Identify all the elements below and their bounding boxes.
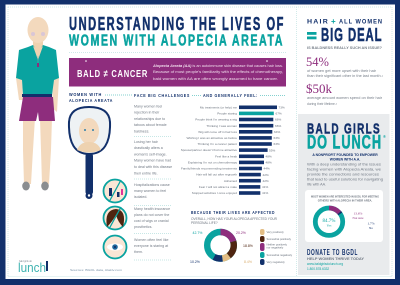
bar chart: feelings: 42% [262,173,269,177]
panel: hair and all women big deal [307,17,383,50]
bar chart: feelings: Thinking I'm a cancer patient [198,142,237,146]
bar chart: feelings: 73% [278,106,285,110]
panel paragraph: With a deep understanding of the issues [307,162,381,166]
title [69,14,285,50]
donut labels: 84.7% [323,219,335,224]
panel paragraph: facing women with Alopecia Areata, we [307,168,381,172]
panel: hair and all women big deal: + [331,17,336,26]
challenges text list: Women often feel like [134,238,168,242]
bar chart: feelings: Wishing I was an attractive as before [186,136,237,140]
bar chart: feelings: Ashamed [224,179,237,183]
challenges text list: Losing her hair [134,140,159,144]
challenges text list: prosthetics. [134,225,152,229]
challenges text list: plans do not cover the [134,213,169,217]
bar chart: feelings: 66% [275,118,281,122]
banner text: Because of most people's familiarity with the effects of chemotherapy, [153,69,283,74]
donut chart: personal life [207,232,234,259]
bar chart: feelings: 44% [264,167,270,171]
bar chart: feelings: 48% [266,154,272,158]
banner headline: BALD ≠ CANCER [77,68,148,80]
bar chart: feelings: 67% [276,112,282,116]
bar chart: feelings: People staring [217,112,237,116]
title: WOMEN WITH ALOPECIA AREATA [69,32,284,50]
bar chart: feelings: Fear I will not attract a mate [199,185,237,189]
donut labels: 10.2% [190,260,200,264]
icon: makeup crossed out [104,180,126,202]
stat: 54 percent [306,55,384,78]
stat: 50k [306,81,383,106]
bar chart: feelings: 48% [266,161,272,165]
banner text [152,63,283,81]
donut legend [260,229,293,265]
challenges text list: everyone is staring at [134,244,168,248]
source: Sources: BGDL data, Alakiv.com [70,268,123,272]
challenges text list: Many health insurance [134,207,170,211]
panel: hair and all women big deal: ALL WOMEN [339,18,383,26]
illustration: hand mirror [69,107,110,199]
banner text: bald women with AA are often wrongly assumed to have cancer. [153,76,278,81]
donut labels: No [369,226,373,230]
bar chart: feelings: 41% [262,191,268,195]
donut labels: 42.7% [192,231,202,235]
bar chart: feelings: Stopped activities I once enjoyed [192,191,237,195]
challenges text list: woman's self-image. [134,152,167,156]
panel heading: ® [383,134,386,139]
bar chart: feelings: 55% [269,148,275,152]
challenges text list: them. [134,250,143,254]
icon: eye [104,236,126,258]
challenges text list: baldness. [134,130,149,134]
bar chart: feelings: 63% [274,142,280,146]
donut legend: Somewhat negatively [266,253,293,257]
heading: women with alopecia areata: WOMEN WITH [69,92,102,97]
challenges text list: rejection in their [134,110,160,114]
panel paragraph: that lead to useful solutions for navigating [307,178,383,182]
banner text: Alopecia Areata (AA) is an autoimmune skin disease that causes hair loss. [152,63,283,68]
donut legend: Very positively [266,230,284,234]
challenges text list: isolated. [134,195,147,199]
bar chart: feelings: Wig will come off in hair loss [198,130,237,134]
donut labels: Yes [327,224,332,228]
banner: bald is not cancer [69,58,286,86]
challenges text list: drastically alters a [134,146,163,150]
bar chart: feelings: Hair will fall out after regrowth [196,173,237,177]
illustration: bald woman [16,17,59,190]
panel paragraph [307,162,383,186]
donut legend: Neither positively [266,243,288,247]
logo: bald girls do lunch: lunch [18,260,46,275]
donut labels: 20.2% [236,231,246,235]
donate [307,248,365,271]
bar chart: feelings: Family/friends recommending treatments [181,167,237,171]
bar chart: feelings: Explaining I'm not on chemotherapy [188,160,237,164]
equals sign [307,32,316,39]
challenges text list [134,104,172,254]
stat: 54 percent: than their significant other in the last month.¹ [307,74,384,78]
stat: 50k: during their lifetime.² [307,102,338,106]
heading: because their lives are affected: OVERALL, HOW HAS YOUR ALOPECIA AFFECTED YOUR [191,217,278,221]
bar chart: feelings: 42% [262,179,269,183]
heading: because their lives are affected: BECAUSE THEIR LIVES ARE AFFECTED [191,210,275,216]
donut labels: 18.8% [243,244,253,248]
panel white card [305,190,383,242]
donut labels: Not sure [353,216,364,220]
donate: DONATE TO BGDL [307,248,358,257]
donut legend: nor negatively [266,246,284,250]
bar chart: feelings: Thinking I was woman [206,124,237,128]
panel: bald girls do lunch [298,114,390,275]
stat: 50k: $50k [306,81,332,96]
donut labels [190,231,253,264]
bar chart: feelings: 41% [262,185,268,189]
stat: 50k: average amount women spend on their hair [307,96,383,100]
bar chart: feelings: 64% [274,130,280,134]
stat: 54 percent: of women get more upset with their hair [307,69,377,73]
heading: face big challenges: FACE BIG CHALLENGES [134,93,190,98]
donut legend: Somewhat positively [266,237,292,241]
bar chart: feelings [181,105,285,195]
panel heading [307,120,386,154]
donut chart: interest [315,208,343,235]
challenges text list: Many women have had [134,158,171,162]
donate: 1.800.578.6332 [307,267,329,271]
donut labels: 8.4% [244,260,252,264]
donate: HELP WOMEN THRIVE TODAY [307,257,365,261]
panel: hair and all women big deal: IS BALDNESS REALLY SUCH AN ISSUE? [307,46,382,50]
bar chart: feelings: Feel like a freak [215,154,237,158]
panel: bald girls do lunch: MOST WOMEN ARE INTERESTED IN BGDL FOR MEETING [311,194,379,198]
bar chart: feelings: 63% [274,136,280,140]
donut labels: 1.7% [367,222,375,226]
panel paragraph: life with AA. [307,182,326,186]
heading: women with alopecia areata [69,92,113,103]
heading: and generally feel: AND GENERALLY FEEL: [203,93,258,98]
donut legend: Very negatively [266,260,285,264]
panel subheading [312,153,378,162]
bar chart: feelings: Spouse/partner doesn't find me attractive [181,148,237,152]
heading: because their lives are affected: PERSONAL LIFE? [191,221,218,225]
icon: wig crossed out [104,206,126,230]
donate: www.baldgirlsdolunch.org [307,262,343,266]
heading: because their lives are affected [191,210,278,225]
challenges text list: many women to feel [134,189,166,193]
donut labels: 13.6% [354,212,363,216]
panel: bald girls do lunch: OTHERS WITH ALOPECIA IN THEIR AREA. [318,198,372,202]
logo: bald girls do lunch: bald girls do [19,260,33,263]
challenges text list: Hospitalizations cause [134,183,170,187]
panel subheading: A NONPROFIT FOUNDED TO EMPOWER [312,153,378,157]
donut labels [323,212,375,230]
challenges text list: taboos about female [134,123,167,127]
bar chart: feelings: 66% [275,124,281,128]
bar chart: feelings: People think I'm wearing a wig [195,118,237,122]
challenges text list: cost of wigs or cranial [134,219,169,223]
panel subheading: WOMEN WITH A.A. [330,158,360,162]
challenges text list: to deal with this disease [134,165,172,169]
stat: 54 percent: 54% [306,55,329,69]
panel: hair and all women big deal: HAIR [307,18,329,26]
panel paragraph: provide the connections and resources [307,172,379,176]
bar chart: feelings: My treatments (or help) me [200,105,237,109]
challenges text list: Many women feel [134,104,162,108]
heading: women with alopecia areata: ALOPECIA AREATA [69,98,113,103]
challenges text list: relationships due to [134,117,165,121]
challenges text list: their entire life. [134,172,158,176]
